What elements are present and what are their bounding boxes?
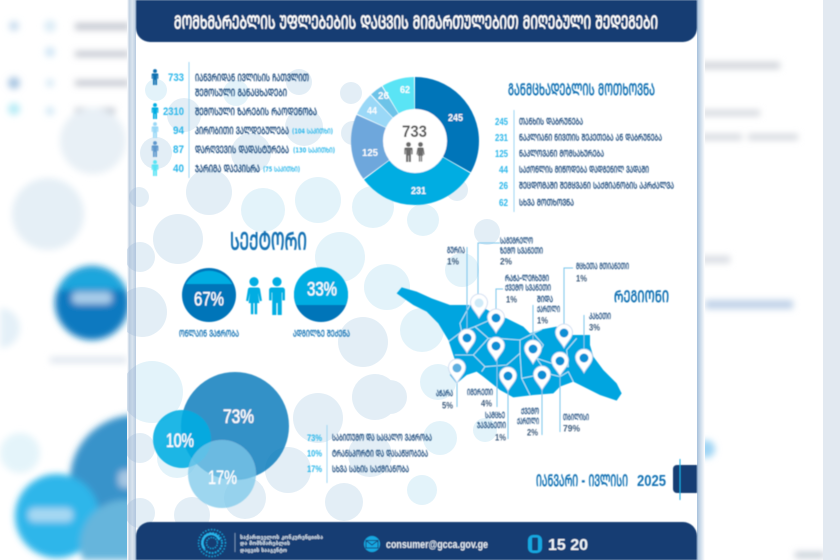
donut chart: 62 — [400, 85, 410, 96]
activity legend: ᲢᲠᲐᲜᲡᲞᲝᲠᲢᲘ ᲓᲐ ᲓᲐᲡᲐᲬᲧᲝᲑᲔᲑᲐ — [332, 450, 428, 460]
region labels: ᲙᲐᲮᲔᲗᲘ — [589, 312, 611, 322]
applicant demands heading: ᲒᲐᲜᲛᲪᲮᲐᲓᲔᲑᲚᲘᲡ ᲛᲝᲗᲮᲝᲕᲜᲐ — [508, 80, 655, 99]
activity legend: 17% — [307, 464, 322, 475]
region labels: 1% — [506, 294, 517, 306]
sector: online trade — [179, 268, 239, 340]
applicant demands list: 231 — [495, 133, 508, 144]
bubble chart: 10% — [166, 431, 194, 452]
region borders — [448, 305, 577, 395]
applicant demands list: 245 — [495, 117, 508, 128]
region labels: 1% — [495, 432, 506, 444]
footer — [136, 522, 697, 560]
applicant demands list: ᲜᲐᲙᲚᲘᲐᲜᲘ ᲜᲘᲕᲗᲘᲡ ᲨᲔᲙᲔᲗᲔᲑᲐ ᲐᲜ ᲓᲐᲑᲠᲣᲜᲔᲑᲐ — [519, 134, 662, 144]
region labels: ᲒᲣᲠᲘᲐ — [447, 246, 465, 256]
icon: people — [404, 142, 425, 162]
activity legend: 73% — [307, 433, 322, 444]
label applications: ᲘᲐᲜᲕᲠᲘᲓᲐᲜ ᲘᲕᲚᲘᲡᲘᲡ ᲩᲐᲗᲕᲚᲘᲗ — [195, 73, 309, 84]
map pins — [448, 294, 592, 391]
icon: person 40 — [152, 160, 158, 176]
icon: person 733 — [152, 69, 158, 85]
title banner — [136, 0, 697, 42]
sector: on-site purchase — [293, 267, 350, 340]
panel edges — [117, 0, 705, 560]
donut chart: 245 — [448, 113, 463, 124]
leader lines — [457, 243, 584, 439]
donut chart: 231 — [411, 186, 426, 197]
region labels: 2% — [500, 256, 512, 268]
region labels: 1% — [537, 316, 548, 326]
key figures list: ᲨᲔᲛᲝᲡᲣᲚᲘ ᲒᲐᲜᲐᲪᲮᲐᲓᲔᲑᲘ — [195, 88, 287, 99]
applicant demands list: 62 — [499, 198, 508, 209]
icon: woman and man — [246, 277, 285, 315]
figure 94: 94 — [173, 125, 185, 137]
key figures list — [152, 62, 335, 178]
white centre panel — [136, 0, 697, 560]
sector: online trade: 67% — [194, 290, 224, 310]
label fine: ᲯᲐᲠᲘᲛᲐ ᲓᲐᲔᲙᲘᲡᲠᲐ — [195, 164, 260, 175]
blurred background: right side — [697, 62, 825, 558]
icon: phone — [528, 535, 542, 553]
region heading: ᲠᲔᲒᲘᲝᲜᲘ — [614, 287, 669, 306]
figure 87: 87 — [173, 144, 184, 156]
icon: person 87 — [152, 141, 158, 157]
label violation: ᲓᲐᲠᲦᲕᲔᲕᲘᲡ ᲓᲐᲓᲐᲡᲢᲣᲠᲔᲑᲐ — [195, 145, 289, 156]
applicant demands list: ᲗᲐᲜᲮᲘᲡ ᲓᲐᲑᲠᲣᲜᲔᲑᲐ — [519, 118, 583, 128]
blurred background: left side — [0, 20, 200, 560]
date tab — [673, 459, 697, 500]
applicant demands list — [495, 110, 674, 212]
figure 733: 733 — [168, 72, 184, 84]
region labels: ᲥᲐᲠᲗᲚᲘ — [537, 305, 560, 315]
activity legend — [307, 425, 432, 483]
key figures list: (130 ᲡᲐᲙᲘᲗᲮᲘ) — [293, 146, 335, 154]
region labels: ᲡᲐᲛᲪᲮᲔ — [485, 411, 505, 421]
applicant demands list: 26 — [499, 181, 508, 192]
date range: 2025 — [637, 473, 666, 490]
logo — [198, 530, 226, 556]
region labels: ᲗᲑᲘᲚᲘᲡᲘ — [563, 413, 589, 423]
sector: on-site purchase: ᲐᲓᲒᲘᲚᲖᲔ ᲨᲔᲫᲔᲜᲐ — [293, 330, 350, 340]
activity legend: 10% — [307, 448, 322, 460]
region labels: ᲥᲕᲔᲛᲝ ᲡᲕᲐᲜᲔᲗᲘ — [505, 284, 551, 294]
donut chart: 125 — [362, 148, 378, 159]
applicant demands list: ᲡᲐᲥᲝᲜᲚᲘᲡ ᲛᲘᲬᲝᲓᲔᲑᲐ ᲓᲐᲓᲒᲔᲜᲘᲚ ᲕᲐᲓᲐᲨᲘ — [519, 166, 649, 176]
agency name: დაცვის სააგენტო — [240, 548, 287, 554]
region labels: ᲖᲔᲛᲝ ᲡᲕᲐᲜᲔᲗᲘ — [500, 246, 543, 256]
applicant demands list: 44 — [499, 165, 508, 176]
region labels: 2% — [527, 428, 538, 438]
sector heading: ᲡᲔᲥᲢᲝᲠᲘ — [230, 228, 307, 256]
label obligation: ᲞᲘᲠᲝᲑᲘᲗᲘ ᲕᲐᲚᲓᲔᲑᲣᲚᲔᲑᲐ — [195, 126, 289, 137]
date range: ᲘᲐᲜᲕᲐᲠᲘ - ᲘᲕᲚᲘᲡᲘ — [536, 471, 628, 490]
region labels: 4% — [481, 398, 492, 410]
figure 2310: 2310 — [163, 106, 184, 118]
icon: envelope — [364, 536, 380, 552]
icon: person 2310 — [152, 103, 158, 119]
agency name — [240, 534, 323, 554]
region labels: 3% — [589, 322, 600, 334]
region labels: ᲡᲐᲛᲔᲒᲠᲔᲚᲝ — [500, 236, 533, 246]
label calls: ᲨᲔᲛᲝᲡᲣᲚᲘ ᲖᲐᲠᲔᲑᲘᲡ ᲠᲐᲝᲓᲔᲜᲝᲑᲐ — [195, 107, 317, 118]
region labels: ᲐᲭᲐᲠᲐ — [436, 389, 453, 399]
region labels: 1% — [576, 274, 587, 284]
sector: online trade: ᲝᲜᲚᲐᲘᲜ ᲕᲐᲭᲠᲝᲑᲐ — [179, 330, 239, 340]
bubble chart: 73% — [223, 407, 254, 428]
applicant demands list: ᲡᲮᲕᲐ ᲛᲝᲗᲮᲝᲕᲜᲐ — [519, 198, 574, 208]
applicant demands list: ᲜᲐᲙᲚᲝᲕᲐᲜᲘ ᲛᲝᲛᲡᲐᲮᲣᲠᲔᲑᲐ — [519, 150, 604, 160]
donut centre total: 733 — [402, 122, 427, 141]
key figures list: (104 ᲡᲐᲙᲘᲗᲮᲘ) — [292, 128, 333, 136]
region labels: ᲠᲐᲭᲐ-ᲚᲔᲩᲮᲣᲛᲘ — [505, 274, 549, 284]
phone number: 15 20 — [548, 537, 588, 554]
sector: on-site purchase: 33% — [307, 280, 337, 300]
bubble chart — [153, 372, 289, 508]
region labels: ᲛᲪᲮᲔᲗᲐ ᲛᲗᲘᲐᲜᲔᲗᲘ — [576, 262, 629, 272]
key figures list: (75 ᲡᲐᲙᲘᲗᲮᲘ) — [263, 166, 300, 174]
region labels: 1% — [447, 256, 459, 268]
donut chart — [362, 85, 463, 197]
agency name: საქართველოს კონკურენციისა — [240, 534, 323, 541]
activity legend: ᲡᲮᲕᲐ ᲡᲐᲮᲘᲡ ᲡᲐᲥᲛᲘᲐᲜᲝᲑᲐ — [332, 465, 409, 475]
agency name: და მომხმარებლის — [240, 540, 290, 547]
region labels — [436, 236, 629, 444]
activity legend: ᲡᲐᲑᲘᲗᲣᲛᲝ ᲓᲐ ᲡᲐᲪᲐᲚᲝ ᲕᲐᲭᲠᲝᲑᲐ — [332, 434, 432, 444]
icon: person 94 — [152, 122, 158, 138]
background bubbles — [117, 69, 500, 533]
bubble chart: 17% — [208, 468, 237, 489]
region labels: ᲘᲛᲔᲠᲔᲗᲘ — [467, 388, 493, 398]
email: consumer@gcca.gov.ge — [386, 539, 488, 551]
applicant demands list: ᲨᲔᲪᲓᲝᲛᲐᲨᲘ ᲨᲔᲛᲧᲕᲐᲜᲘ ᲡᲐᲥᲛᲘᲐᲜᲝᲑᲘᲡ ᲐᲙᲠᲫᲐᲚᲕᲐ — [519, 182, 674, 192]
region labels: ᲨᲘᲓᲐ — [537, 295, 553, 305]
donut chart: 44 — [367, 106, 377, 117]
region labels: ᲥᲐᲠᲗᲚᲘ — [517, 417, 539, 427]
region labels: 79% — [563, 424, 580, 434]
region labels: ᲯᲐᲕᲐᲮᲔᲗᲘ — [477, 421, 506, 431]
applicant demands list: 125 — [495, 149, 508, 160]
donut chart: 26 — [378, 91, 389, 102]
figure 40: 40 — [173, 163, 184, 175]
region labels: ᲥᲕᲔᲛᲝ — [521, 407, 539, 417]
region labels: 5% — [442, 400, 453, 412]
map of Georgia — [397, 243, 622, 439]
